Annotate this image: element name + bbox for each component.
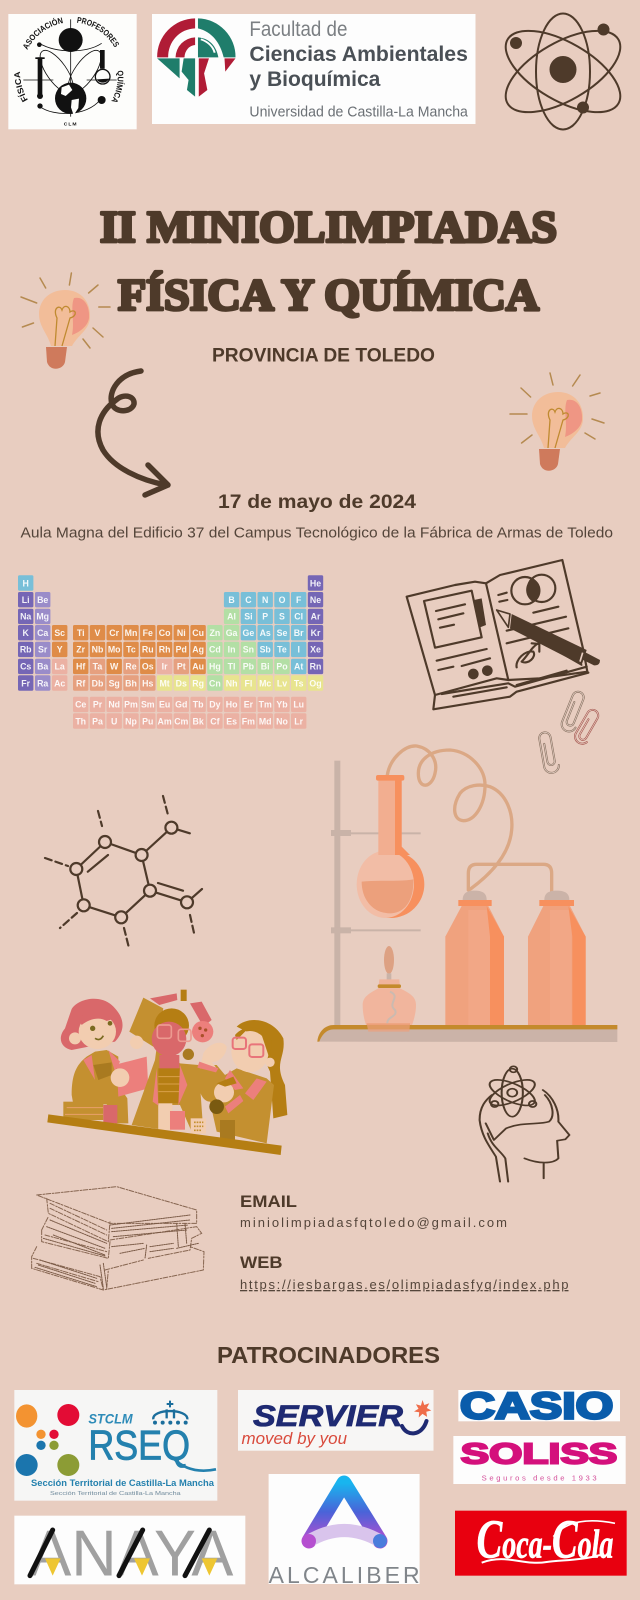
periodic table: V — [95, 628, 101, 638]
periodic table: Cd — [209, 645, 221, 655]
periodic table: Bk — [192, 716, 204, 726]
contact block — [240, 1193, 568, 1292]
sponsor logo: SERVIER — [238, 1390, 434, 1451]
logo: Asociación Profesores Física y Química CLM: PROFESORES — [77, 17, 119, 47]
logo: Facultad de Ciencias Ambientales y Bioquímica: Facultad de — [249, 18, 347, 41]
periodic table: Tc — [126, 645, 136, 655]
logo: Facultad de Ciencias Ambientales y Bioquímica: Ciencias Ambientales — [249, 43, 468, 66]
tubes — [387, 746, 552, 892]
sponsor logo: CASIO: CASIO — [460, 1384, 613, 1426]
logo: Facultad de Ciencias Ambientales y Bioquímica — [152, 14, 476, 124]
periodic table: Cr — [109, 628, 120, 638]
logo: Asociación Profesores Física y Química CLM: QUÍMICA — [111, 70, 125, 102]
periodic table: Au — [192, 662, 204, 672]
periodic table: Lv — [277, 678, 287, 688]
icon: paperclips — [538, 690, 603, 774]
periodic table: Sb — [260, 645, 271, 655]
periodic table: Fr — [21, 678, 31, 688]
illustration: laboratory glassware — [317, 746, 617, 1042]
icon: open book with pen — [407, 560, 600, 709]
periodic table: K — [23, 628, 30, 638]
sponsor logo: RSEQ: STCLM — [88, 1410, 133, 1426]
periodic table: Bh — [125, 678, 137, 688]
periodic table: Sc — [54, 628, 65, 638]
burner — [363, 946, 416, 1032]
periodic table: Ag — [192, 645, 204, 655]
periodic table: Pr — [93, 700, 103, 710]
title: II MINIOLIMPIADAS — [100, 202, 557, 252]
periodic table: Ba — [37, 662, 48, 672]
periodic table: Rf — [76, 678, 85, 688]
periodic table: Fe — [143, 628, 153, 638]
periodic table: In — [228, 645, 236, 655]
periodic table: Lr — [294, 716, 304, 726]
periodic table: Mg — [36, 612, 49, 622]
periodic table: Mt — [159, 678, 170, 688]
periodic table: Sm — [141, 700, 155, 710]
periodic table: Nh — [226, 678, 237, 688]
periodic table: Sn — [243, 645, 254, 655]
flask — [357, 775, 424, 918]
periodic table: Ca — [37, 628, 48, 638]
periodic table: Be — [37, 595, 48, 605]
periodic table: Fl — [244, 678, 252, 688]
sponsor logo: SERVIER: SERVIER — [253, 1400, 403, 1433]
icon: molecule — [45, 796, 202, 948]
periodic table: Rb — [20, 645, 32, 655]
periodic table: Po — [276, 662, 288, 672]
venue: Aula Magna del Edificio 37 del Campus Tecnológico de la Fábrica de Armas de Toledo — [20, 526, 613, 542]
sponsor logo: SOLISS: SOLISS — [461, 1438, 617, 1470]
sponsor logo: RSEQ: Sección Territorial de Castilla-La Mancha — [31, 1478, 215, 1488]
periodic table: Pu — [142, 716, 153, 726]
periodic table: Np — [125, 716, 137, 726]
periodic table: Es — [226, 716, 237, 726]
periodic table: P — [262, 612, 268, 622]
periodic table: Cm — [174, 716, 189, 726]
periodic table: Pb — [243, 662, 255, 672]
icon: stack of books — [32, 1187, 204, 1290]
periodic table: Dy — [209, 700, 221, 710]
icon: light bulb right — [510, 373, 604, 471]
paperclip one — [559, 690, 588, 734]
periodic table: Th — [75, 716, 86, 726]
periodic table: Ts — [294, 678, 304, 688]
periodic table: Hg — [209, 662, 221, 672]
desk — [47, 1114, 282, 1155]
periodic table: Ni — [177, 628, 186, 638]
periodic table: Sr — [38, 645, 48, 655]
sponsor logo: SOLISS: Seguros desde 1933 — [482, 1474, 597, 1483]
periodic table: At — [294, 662, 303, 672]
icon: light bulb left — [21, 273, 110, 369]
email address: miniolimpiadasfqtoledo@gmail.com — [240, 1215, 507, 1230]
periodic table: He — [310, 578, 321, 588]
periodic table: Nd — [108, 700, 120, 710]
periodic table: F — [296, 595, 302, 605]
periodic table: Rn — [310, 662, 321, 672]
periodic table: Ge — [243, 628, 254, 638]
periodic table: Mn — [125, 628, 137, 638]
periodic table: Fm — [242, 716, 255, 726]
periodic table: Ra — [37, 678, 48, 688]
periodic table: Na — [20, 612, 31, 622]
periodic table: O — [279, 595, 286, 605]
logo: Asociación Profesores Física y Química CLM: CLM — [64, 121, 78, 127]
periodic table: Zn — [210, 628, 220, 638]
periodic table: Al — [227, 612, 236, 622]
periodic table: Yb — [276, 700, 288, 710]
sponsor logo: ANAYA: ANAYA — [29, 1517, 234, 1590]
emblem: shield — [157, 18, 236, 97]
periodic table: Lu — [293, 700, 304, 710]
periodic table: Og — [309, 678, 322, 688]
periodic table: Eu — [159, 700, 170, 710]
illustration: three scientists — [47, 990, 287, 1155]
periodic table: Sg — [109, 678, 120, 688]
scientist right — [197, 1020, 287, 1143]
periodic table: Ds — [176, 678, 187, 688]
periodic table: Tl — [228, 662, 236, 672]
sponsor logo: ALCALIBER — [269, 1474, 420, 1588]
sponsor logo: Coca-Cola: Coca-Cola — [477, 1508, 613, 1569]
periodic table: Gd — [175, 700, 187, 710]
logo: Facultad de Ciencias Ambientales y Bioquímica: y Bioquímica — [249, 68, 381, 91]
periodic table: Hs — [142, 678, 154, 688]
periodic table: Pm — [124, 700, 138, 710]
periodic table: Cf — [210, 716, 220, 726]
periodic table: Md — [259, 716, 272, 726]
periodic table: Nb — [92, 645, 104, 655]
email label: EMAIL — [240, 1193, 297, 1211]
stand — [331, 761, 421, 1027]
web address: https://iesbargas.es/olimpiadasfyq/index.php — [240, 1277, 568, 1292]
logo: Asociación Profesores Física y Química CLM: FÍSICA — [14, 72, 28, 102]
sponsor logo: SERVIER: moved by you — [242, 1430, 347, 1448]
periodic table: Ga — [226, 628, 238, 638]
periodic table: Rg — [192, 678, 204, 688]
periodic table: H — [23, 578, 29, 588]
periodic table: Ir — [162, 662, 168, 672]
periodic table: Rh — [159, 645, 170, 655]
logo: Asociación Profesores Física y Química CLM — [8, 14, 137, 130]
periodic table: Ne — [310, 595, 321, 605]
periodic table: Cu — [192, 628, 204, 638]
periodic table: Ac — [54, 678, 65, 688]
periodic table: Li — [22, 595, 30, 605]
periodic table: Xe — [310, 645, 321, 655]
periodic table: Pt — [177, 662, 186, 672]
periodic table: Zr — [76, 645, 86, 655]
scientist centre — [129, 990, 213, 1134]
paperclip two — [572, 708, 603, 746]
sponsor logo: SOLISS — [453, 1436, 626, 1484]
subtitle: province: PROVINCIA DE TOLEDO — [212, 346, 435, 366]
periodic table: Er — [244, 700, 254, 710]
periodic table: Am — [158, 716, 172, 726]
periodic table: Y — [57, 645, 63, 655]
periodic table: Ti — [77, 628, 85, 638]
periodic table: Ho — [226, 700, 238, 710]
icon: head with atom — [480, 1066, 569, 1182]
bench — [317, 1023, 617, 1042]
periodic table: Cn — [209, 678, 221, 688]
icon: atom — [493, 14, 633, 130]
periodic table: La — [55, 662, 65, 672]
date: 17 de mayo de 2024 — [218, 492, 416, 513]
periodic table: Kr — [311, 628, 321, 638]
arrow: curly — [98, 371, 168, 495]
paperclip three — [538, 731, 560, 774]
periodic table: Mc — [259, 678, 271, 688]
periodic table: Te — [277, 645, 287, 655]
periodic table: B — [228, 595, 235, 605]
periodic table: Tb — [193, 700, 204, 710]
periodic table: Pd — [176, 645, 187, 655]
periodic table: Re — [125, 662, 137, 672]
periodic table: As — [260, 628, 271, 638]
periodic table: Co — [159, 628, 171, 638]
periodic table: Tm — [259, 700, 272, 710]
periodic table: Pa — [92, 716, 103, 726]
logo: Asociación Profesores Física y Química CLM: ASOCIACIÓN — [23, 18, 63, 50]
sponsor logo: RSEQ — [14, 1390, 217, 1501]
web label: WEB — [240, 1254, 283, 1272]
periodic table — [18, 575, 323, 729]
periodic table: No — [276, 716, 288, 726]
periodic table: Ar — [311, 612, 321, 622]
periodic table: Se — [277, 628, 287, 638]
periodic table: Hf — [76, 662, 85, 672]
periodic table: C — [245, 595, 252, 605]
scientist left — [61, 999, 148, 1123]
periodic table: I — [297, 645, 300, 655]
logo: Facultad de Ciencias Ambientales y Bioquímica: Universidad de Castilla-La Mancha — [249, 104, 469, 120]
periodic table: Os — [142, 662, 154, 672]
periodic table: Ce — [75, 700, 86, 710]
periodic table: Br — [294, 628, 304, 638]
periodic table: Si — [244, 612, 253, 622]
periodic table: S — [279, 612, 285, 622]
sponsor logo: RSEQ: Sección Territorial de Castilla-La Mancha — [50, 1491, 182, 1497]
bottles — [445, 891, 586, 1026]
periodic table: N — [262, 595, 268, 605]
periodic table: Bi — [261, 662, 270, 672]
periodic table: Cs — [20, 662, 31, 672]
periodic table: Ta — [93, 662, 102, 672]
periodic table: Mo — [108, 645, 121, 655]
title — [100, 202, 557, 320]
periodic table: Db — [92, 678, 104, 688]
periodic table: U — [111, 716, 117, 726]
heading: sponsors: PATROCINADORES — [217, 1342, 440, 1368]
sponsor logo: ALCALIBER: ALCALIBER — [269, 1562, 420, 1588]
sponsor logo: RSEQ: RSEQ — [88, 1421, 190, 1468]
periodic table: W — [110, 662, 119, 672]
periodic table: Ru — [142, 645, 154, 655]
periodic table: Cl — [294, 612, 303, 622]
title: FÍSICA Y QUÍMICA — [118, 270, 539, 320]
